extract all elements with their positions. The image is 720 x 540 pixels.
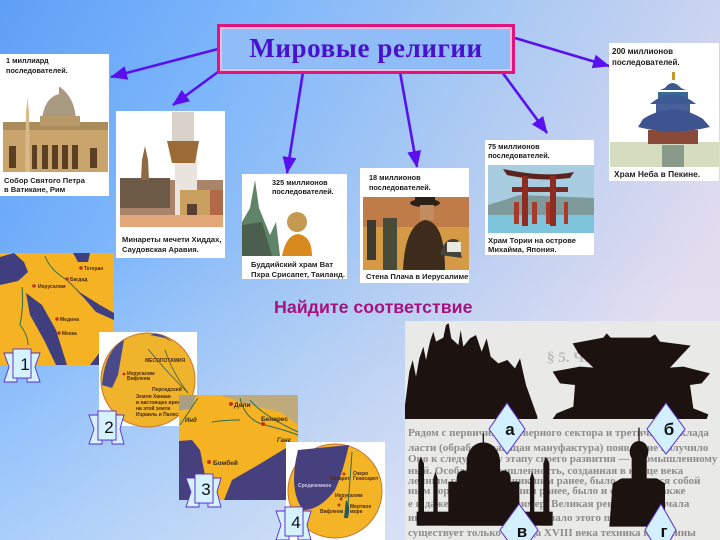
- diamond label а: а: [505, 420, 515, 439]
- map 2: Mesopotamia: МЕСОПОТАМИЯ: [145, 358, 185, 364]
- panel: Torii shrine card: Михайма, Япония.: [488, 245, 557, 254]
- panel: Buddhist temple card: Пхра Срисапет, Таиланд.: [251, 270, 345, 279]
- panel: Temple of Heaven card: [609, 43, 719, 181]
- title: Мировые религии: [249, 33, 483, 63]
- panel: St Peter's Basilica card: [0, 54, 109, 196]
- icon: Wailing Wall illustration: [363, 197, 469, 270]
- panel: Temple of Heaven card: 200 миллионов: [612, 47, 673, 56]
- panel: Torii shrine card: 75 миллионов: [488, 142, 540, 151]
- map 4: Palestine: Иерусалим: [335, 493, 363, 499]
- map 4: Palestine: [286, 442, 385, 540]
- faint textbook text: ласти (обрабатывающая мануфактура) появление получило: [408, 442, 709, 454]
- icon: church silhouette: [609, 428, 665, 527]
- map 1: Arabia: Багдад: [70, 277, 88, 283]
- map 2: Mesopotamia: в настоящее время: [136, 400, 184, 406]
- map 2: Mesopotamia: Земля Ханаан: [136, 394, 171, 400]
- faint textbook text: становл: [625, 385, 664, 397]
- badge 2: [89, 411, 124, 444]
- badge 3: 3: [201, 480, 211, 499]
- map 2: Mesopotamia: Иерусалим: [127, 371, 155, 377]
- map 1: Arabia: Иерусалим: [38, 284, 66, 290]
- panel: Temple of Heaven card: последователей.: [612, 58, 680, 67]
- panel: silhouettes of religious buildings: [405, 321, 720, 540]
- faint textbook text: существует только с конца XVIII века техника и машины: [408, 527, 696, 539]
- icon: pagoda silhouette: [553, 333, 710, 419]
- badge 2: 2: [104, 418, 114, 437]
- map 1: Arabia: [0, 253, 114, 365]
- map 3: India: Дели: [234, 402, 250, 409]
- map 2: Mesopotamia: Вифлеем: [127, 375, 151, 382]
- map 1: Arabia: Тегеран: [84, 266, 103, 272]
- panel: Wailing Wall card: 18 миллионов: [369, 173, 421, 182]
- map 4: Palestine: Озеро: [353, 471, 368, 477]
- badge 1: [4, 349, 40, 382]
- heading: find matches: Найдите соответствие: [274, 297, 473, 317]
- map 2: Mesopotamia: на этой земле: [136, 405, 171, 412]
- badge 1: 1: [20, 355, 30, 374]
- map 2: Mesopotamia: [99, 332, 197, 427]
- faint textbook text: ленным городом, возникшим ранее, было и остается собой: [408, 475, 701, 487]
- faint textbook text: Рядом с первичным, северного сектора и третичного уклада: [408, 427, 709, 439]
- diamond label г: [645, 504, 676, 540]
- map 4: Palestine: Вифлеем: [320, 508, 344, 515]
- map 2: Mesopotamia: Персидский: [152, 386, 182, 393]
- diamond label в: [500, 504, 538, 540]
- arrows from title to cards: [111, 38, 609, 173]
- icon: torii gate illustration: [488, 165, 594, 233]
- map 3: India: Бомбей: [213, 459, 238, 467]
- panel: St Peter's Basilica card: последователей.: [6, 66, 68, 75]
- badge 4: 4: [291, 513, 301, 532]
- map 2: Mesopotamia: Израиль и Палестина: [136, 412, 190, 418]
- panel: Wailing Wall card: последователей.: [369, 183, 431, 192]
- map 3: India: Бенарес: [261, 416, 288, 423]
- map 3: India: [179, 395, 298, 500]
- panel: St Peter's Basilica card: 1 миллиард: [6, 56, 49, 65]
- panel: Buddhist temple card: Буддийский храм Ват: [251, 260, 333, 269]
- icon: Temple of Heaven illustration: [610, 72, 719, 167]
- panel: Temple of Heaven card: Храм Неба в Пекине.: [614, 169, 700, 179]
- panel: St Peter's Basilica card: Собор Святого Петра: [4, 176, 86, 185]
- panel: Torii shrine card: последователей.: [488, 151, 550, 160]
- map 4: Palestine: Средиземное: [298, 483, 332, 489]
- panel: Wailing Wall card: Стена Плача в Иерусалиме: [366, 272, 468, 281]
- icon: basilica illustration: [3, 87, 108, 172]
- faint textbook text: § 5. ЧЕЛОВ: [547, 350, 627, 366]
- map 3: India: Ганг: [277, 438, 292, 444]
- title: [217, 24, 515, 74]
- map 4: Palestine: море: [350, 509, 363, 515]
- faint textbook text: е и даже позднее. Например, Великая революция начала: [408, 498, 690, 510]
- map 1: Arabia: Медина: [60, 317, 79, 323]
- panel: mosque minarets card: Саудовская Аравия.: [122, 245, 199, 254]
- faint textbook text: [408, 350, 718, 539]
- panel: mosque minarets card: [116, 111, 225, 258]
- faint textbook text: ным городом, возникшим ранее, было и остается также: [408, 485, 686, 497]
- panel: Buddhist temple card: 325 миллионов: [272, 178, 328, 187]
- map 4: Palestine: Мертвое: [350, 504, 371, 510]
- diamond label а: [489, 403, 525, 454]
- map 3: India: Инд: [185, 418, 197, 424]
- faint textbook text: ный. Особая промышленность, созданная в конце века: [408, 465, 684, 477]
- icon: cathedral silhouette: [405, 323, 537, 419]
- diamond label б: б: [664, 420, 674, 439]
- badge 4: [276, 507, 311, 540]
- diamond label б: [647, 403, 685, 454]
- icon: mosque illustration: [120, 112, 223, 227]
- badge 3: [186, 474, 221, 507]
- icon: Taj Mahal silhouette: [417, 433, 553, 526]
- map 4: Palestine: Генисарет: [353, 476, 379, 482]
- panel: Torii shrine card: [485, 140, 594, 255]
- icon: temple and monk illustration: [242, 180, 312, 256]
- faint textbook text: ик К. Ясперс считает, что начало этого пути уходит: [408, 512, 664, 524]
- panel: St Peter's Basilica card: в Ватикане, Рим: [4, 185, 66, 194]
- faint textbook text: Оно к следующему этапу своего развития — промышленному: [408, 453, 718, 465]
- map 4: Palestine: Назарет: [330, 476, 350, 482]
- panel: mosque minarets card: Минареты мечети Хиддах,: [122, 235, 222, 244]
- panel: Buddhist temple card: [242, 174, 347, 279]
- panel: Buddhist temple card: последователей.: [272, 187, 334, 196]
- map 1: Arabia: Мекка: [62, 331, 77, 337]
- panel: Wailing Wall card: [360, 168, 469, 283]
- panel: Torii shrine card: Храм Тории на острове: [488, 236, 576, 245]
